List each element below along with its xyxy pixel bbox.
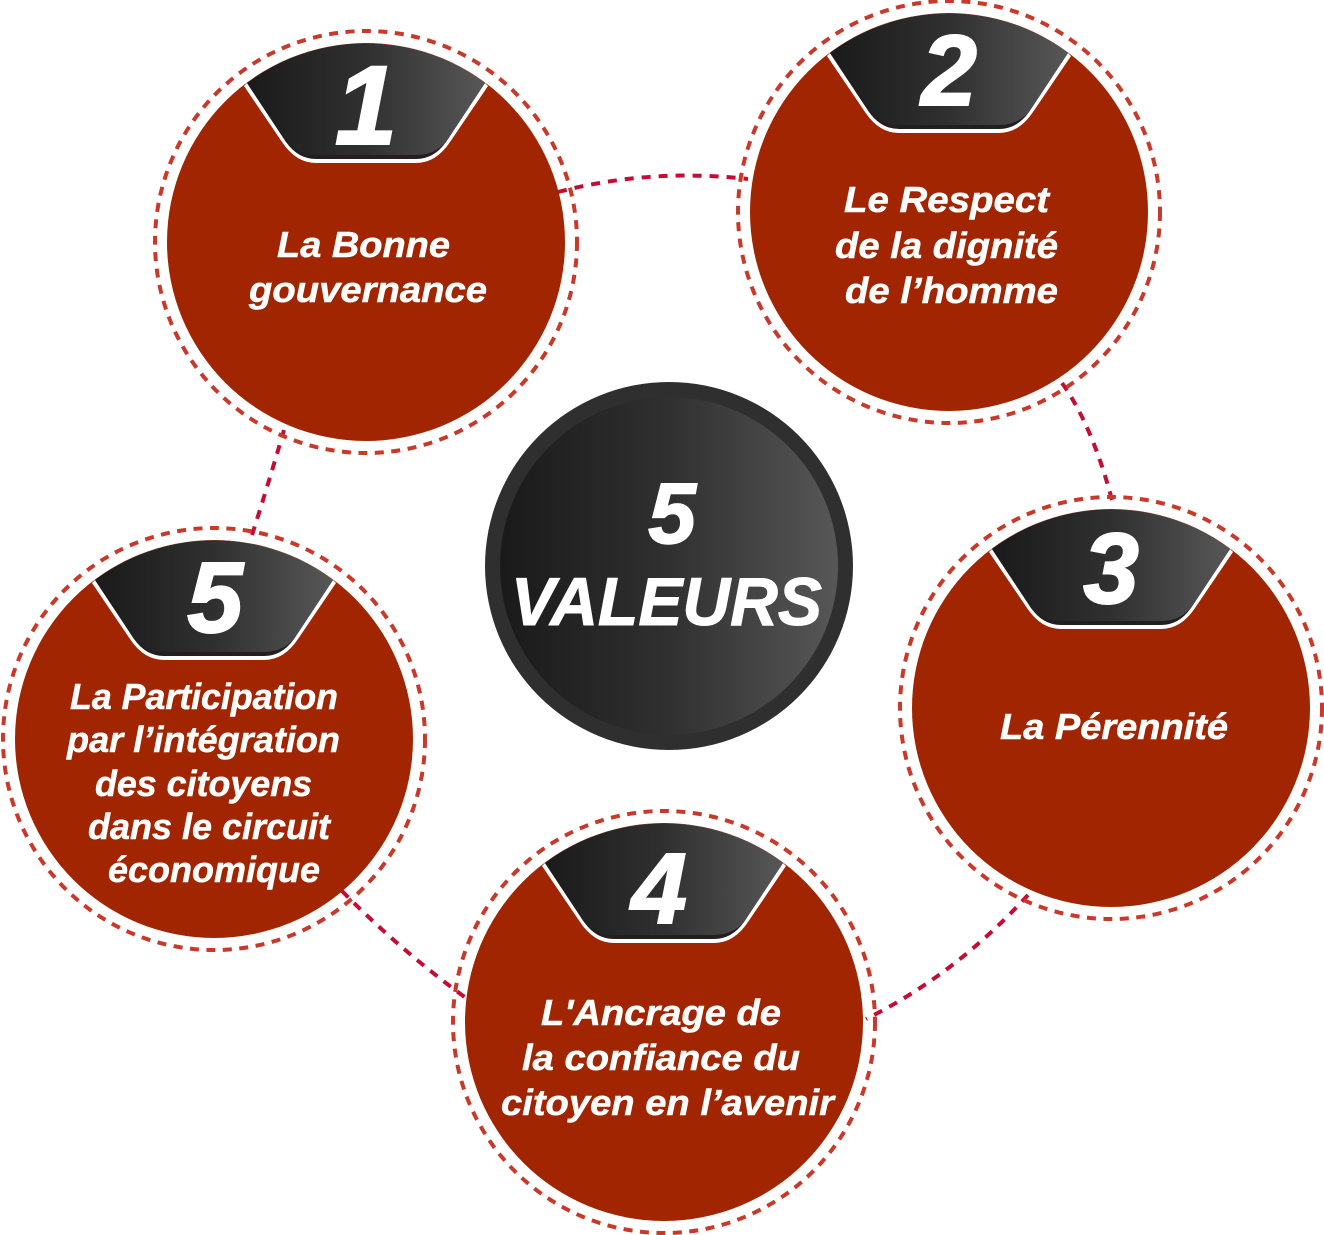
value 3: La Pérennité	[900, 497, 1322, 919]
value 2: Le Respect de la dignité de l'homme	[738, 1, 1160, 423]
value 4: L'Ancrage de la confiance du citoyen en l'avenir: citoyen en l’avenir	[501, 1082, 836, 1123]
connector: 2 to 3	[1062, 383, 1112, 500]
value 4: L'Ancrage de la confiance du citoyen en l'avenir: la confiance du	[522, 1037, 800, 1078]
value 1: La Bonne gouvernance: 1	[335, 43, 397, 168]
value 5: La Participation par l'intégration des citoyens dans le circuit économique: économique	[108, 849, 320, 890]
value 2: Le Respect de la dignité de l'homme: Le Respect	[844, 179, 1051, 220]
connector: 3 to 4	[866, 895, 1028, 1019]
tab 1	[244, 43, 488, 163]
value 1: La Bonne gouvernance	[155, 31, 577, 453]
center circle: VALEURS	[511, 564, 822, 640]
value 5: La Participation par l'intégration des citoyens dans le circuit économique: dans le circuit	[88, 806, 332, 847]
value 5: La Participation par l'intégration des citoyens dans le circuit économique: 5	[187, 542, 244, 654]
connector: 1 to 2	[558, 176, 748, 192]
connector: 4 to 5	[342, 891, 466, 998]
value 2: Le Respect de la dignité de l'homme: de l’homme	[845, 270, 1058, 311]
value 5: La Participation par l'intégration des citoyens dans le circuit économique: par l’intégration	[66, 719, 340, 760]
tab 3	[989, 509, 1233, 629]
value 3: La Pérennité: 3	[1083, 513, 1139, 625]
value 4: L'Ancrage de la confiance du citoyen en l'avenir: L'Ancrage de	[541, 992, 781, 1033]
value 2: Le Respect de la dignité de l'homme: 2	[919, 15, 977, 127]
value 1: La Bonne gouvernance: gouvernance	[248, 269, 487, 310]
value 5: La Participation par l'intégration des citoyens dans le circuit économique	[3, 528, 425, 950]
value 3: La Pérennité: La Pérennité	[1000, 706, 1228, 747]
center circle: 5	[648, 466, 697, 562]
tab 5	[92, 540, 336, 660]
tab 4	[542, 823, 786, 943]
value 4: L'Ancrage de la confiance du citoyen en l'avenir: 4	[629, 833, 687, 945]
tab 2	[827, 13, 1071, 133]
value 4: L'Ancrage de la confiance du citoyen en l'avenir	[453, 811, 875, 1233]
value 5: La Participation par l'intégration des citoyens dans le circuit économique: La Participation	[70, 676, 338, 717]
value 2: Le Respect de la dignité de l'homme: de la dignité	[835, 225, 1058, 266]
value 5: La Participation par l'intégration des citoyens dans le circuit économique: des citoyens	[95, 763, 312, 804]
connector: 5 to 1	[252, 430, 284, 535]
center circle	[485, 382, 853, 750]
value 1: La Bonne gouvernance: La Bonne	[277, 224, 450, 265]
